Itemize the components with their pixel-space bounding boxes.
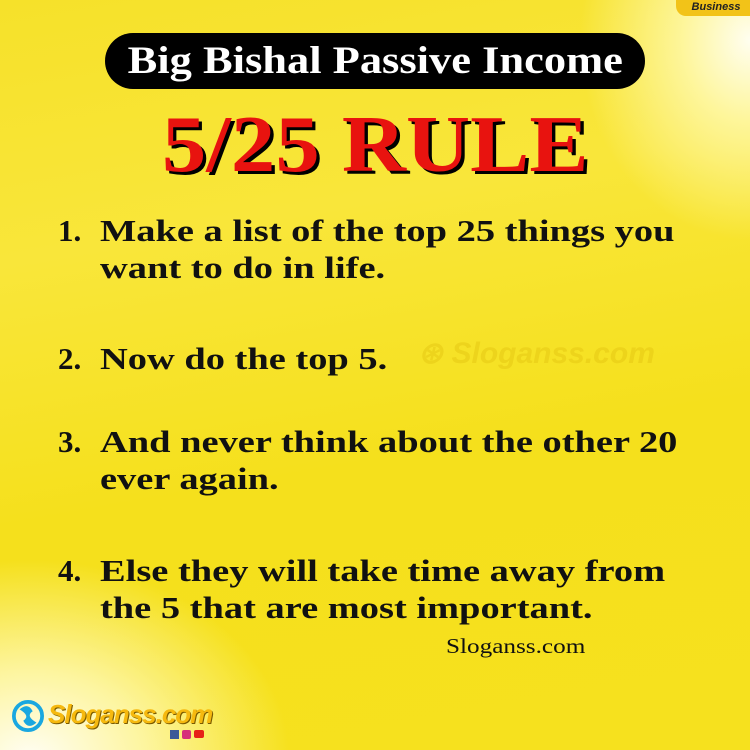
item 1: 1. (58, 213, 81, 248)
item 2: 2. (58, 341, 81, 376)
watermark: ⊛ Sloganss.com (418, 337, 655, 370)
item 3: 3. (58, 424, 81, 459)
source text: Sloganss.com (446, 634, 585, 658)
item 3 (58, 424, 677, 496)
item 1: Make a list of the top 25 things you (100, 213, 675, 248)
item 4: the 5 that are most important. (100, 590, 593, 625)
badge: Business: Business (692, 1, 740, 13)
badge: Business (676, 0, 750, 16)
item 3: And never think about the other 20 (100, 424, 677, 459)
logo text: Sloganss.com (48, 699, 212, 729)
icon: logo swirl (12, 700, 44, 732)
item 4 (58, 553, 665, 625)
icons: social (170, 730, 204, 739)
item 4: Else they will take time away from (100, 553, 665, 588)
title: 5/25 RULE: 5/25 RULE (162, 101, 588, 189)
item 1: want to do in life. (100, 250, 385, 285)
logo (12, 699, 214, 739)
item 4: 4. (58, 553, 81, 588)
item 2: Now do the top 5. (100, 341, 387, 376)
item 1 (58, 213, 675, 285)
item 3: ever again. (100, 461, 279, 496)
heading pill: Big Bishal Passive Income (127, 39, 623, 82)
